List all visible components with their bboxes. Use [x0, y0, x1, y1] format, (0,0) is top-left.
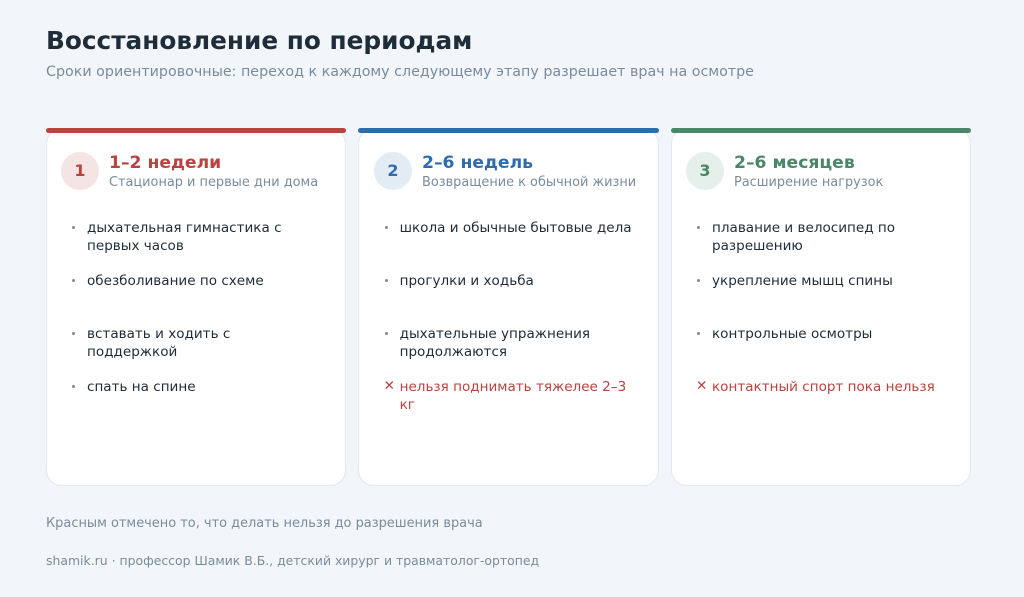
- item: укрепление мышц спины: [712, 273, 893, 289]
- item: контрольные осмотры: [712, 326, 872, 342]
- panel: period 1: [46, 128, 346, 486]
- warning item: кг: [400, 397, 415, 413]
- heading 3: 2–6 месяцев: [734, 152, 855, 172]
- badge 3: 3: [699, 161, 711, 180]
- heading 1: 1–2 недели: [109, 152, 221, 172]
- title: Восстановление по периодам: [46, 26, 472, 55]
- badge 3: [686, 152, 724, 190]
- item: поддержкой: [87, 344, 177, 360]
- item: дыхательная гимнастика с: [87, 220, 282, 236]
- item: спать на спине: [87, 379, 196, 395]
- panel: period 2: [358, 128, 659, 486]
- item: плавание и велосипед по: [712, 220, 895, 236]
- item: вставать и ходить с: [87, 326, 230, 342]
- footnote: Красным отмечено то, что делать нельзя до разрешения врача: [46, 516, 483, 531]
- item: [697, 220, 895, 254]
- item: [72, 220, 282, 254]
- item: школа и обычные бытовые дела: [400, 220, 632, 236]
- item: разрешению: [712, 238, 803, 254]
- badge 2: 2: [387, 161, 399, 180]
- item: [385, 326, 590, 360]
- badge 2: [374, 152, 412, 190]
- subheading 1: Стационар и первые дни дома: [109, 174, 318, 190]
- item: продолжаются: [400, 344, 507, 360]
- source line: shamik.ru · профессор Шамик В.Б., детский хирург и травматолог-ортопед: [46, 553, 539, 568]
- warning item: [384, 378, 626, 413]
- item: обезболивание по схеме: [87, 273, 264, 289]
- warning item: нельзя поднимать тяжелее 2–3: [400, 379, 626, 395]
- item: прогулки и ходьба: [400, 273, 534, 289]
- heading 2: 2–6 недель: [422, 152, 533, 172]
- item: [72, 326, 230, 360]
- subtitle: Сроки ориентировочные: переход к каждому следующему этапу разрешает врач на осмотре: [46, 64, 754, 80]
- item: первых часов: [87, 238, 184, 254]
- panel: period 3: [671, 128, 971, 486]
- warning item: контактный спорт пока нельзя: [712, 379, 935, 395]
- subheading 3: Расширение нагрузок: [734, 174, 883, 190]
- subheading 2: Возвращение к обычной жизни: [422, 174, 636, 190]
- badge 1: [61, 152, 99, 190]
- badge 1: 1: [74, 161, 86, 180]
- panel: period 2: ✕: [384, 378, 395, 394]
- item: дыхательные упражнения: [400, 326, 590, 342]
- panel: period 3: ✕: [696, 378, 707, 394]
